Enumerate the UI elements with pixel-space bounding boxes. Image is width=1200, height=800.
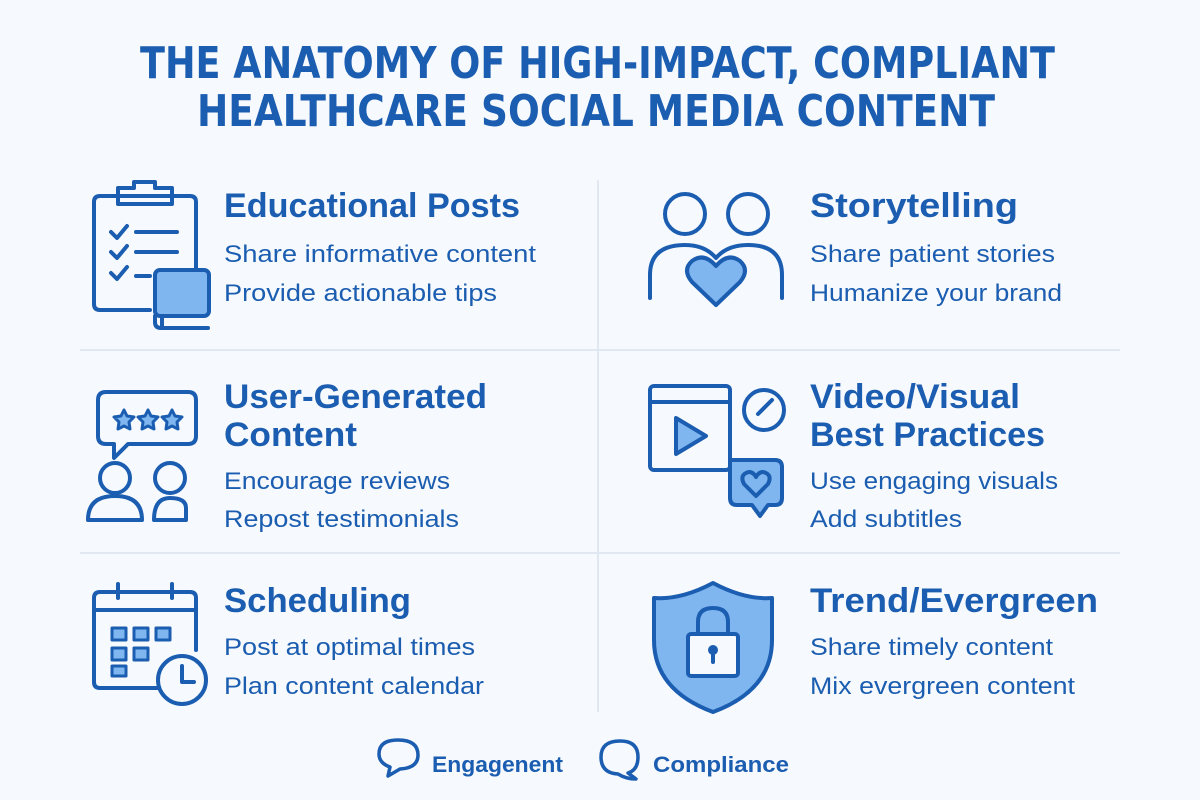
text block: Provide actionable tips [224,280,497,307]
text block [810,241,1062,307]
legend [379,740,789,779]
legend label: compliance: Compliance [653,752,789,777]
text block: Repost testimonials [224,506,459,533]
icon: review bubble and users [88,392,196,520]
text block [810,634,1075,700]
heading: Best Practices [810,416,1045,454]
panel: educational posts [94,182,536,328]
text block [224,468,459,533]
icon: clipboard and book [94,182,209,328]
heading: User-Generated [224,378,487,416]
icon: video player with heart bubble [650,386,784,516]
text block: Encourage reviews [224,468,450,495]
text block: Post at optimal times [224,634,475,661]
icon: people with heart [650,194,782,305]
heading: Trend/Evergreen [810,582,1098,620]
text block: Add subtitles [810,506,962,533]
heading: Storytelling [810,187,1018,225]
text block [224,634,484,700]
text block: Humanize your brand [810,280,1062,307]
text block [224,241,536,307]
icon: calendar with clock [94,584,206,704]
title [140,38,1055,137]
text block [810,468,1058,533]
panel: trend/evergreen [654,582,1098,712]
heading [810,378,1045,454]
panel: storytelling [650,187,1062,307]
heading: Educational Posts [224,187,520,225]
legend label: engagement: Engagenent [432,752,564,777]
text block: Share patient stories [810,241,1055,268]
panel: video/visual [650,378,1058,533]
icon: engagement bubble [379,740,418,776]
panel: scheduling [94,582,484,704]
text block: Share timely content [810,634,1053,661]
heading: Video/Visual [810,378,1020,416]
title: HEALTHCARE SOCIAL MEDIA CONTENT [197,86,995,137]
panel: user-generated content [88,378,487,533]
text block: Plan content calendar [224,673,484,700]
icon: shield with lock [654,583,772,712]
text block: Share informative content [224,241,536,268]
heading: Scheduling [224,582,411,620]
heading [224,378,487,454]
text block: Mix evergreen content [810,673,1075,700]
heading: Content [224,416,357,454]
text block: Use engaging visuals [810,468,1058,495]
icon: compliance bubble [601,741,638,779]
